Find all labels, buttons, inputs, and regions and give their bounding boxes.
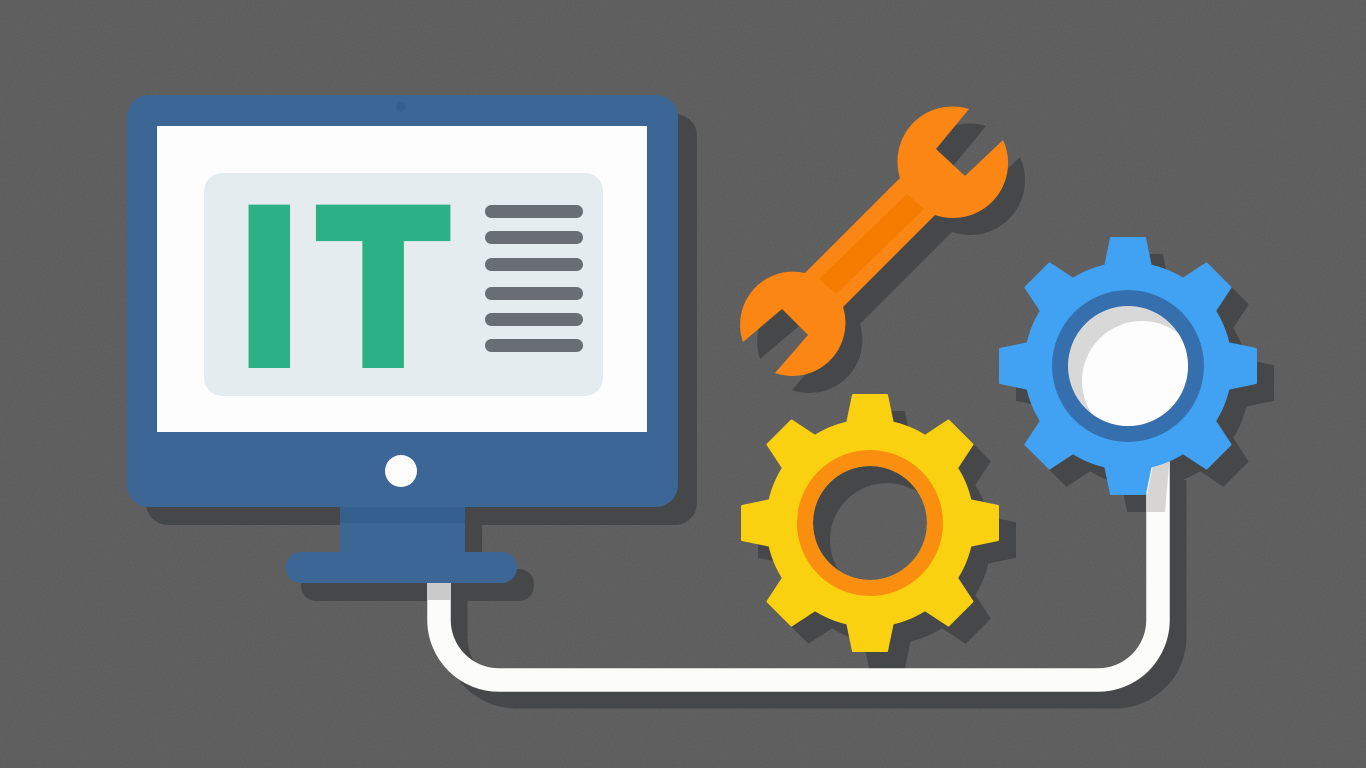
blue ring (1060, 298, 1196, 434)
drop shadows (146, 114, 1273, 697)
icon: wrench (740, 106, 1008, 376)
screen panel (204, 173, 603, 396)
icon: blue gear (1000, 238, 1256, 494)
monitor body (127, 95, 678, 507)
power button (385, 455, 417, 487)
screen (157, 126, 647, 432)
text lines (485, 205, 583, 352)
camera dot (396, 102, 406, 112)
white center (1082, 321, 1188, 426)
icon: yellow gear (742, 395, 998, 651)
orange ring (805, 458, 935, 588)
monitor (127, 95, 678, 583)
heading: IT: IT (240, 164, 447, 409)
illustration: IT monitor connected to wrench and gears (127, 95, 1274, 708)
monitor base (286, 552, 517, 583)
wrench handle inset (819, 194, 924, 294)
cable (427, 460, 1170, 680)
monitor stand (340, 500, 465, 553)
